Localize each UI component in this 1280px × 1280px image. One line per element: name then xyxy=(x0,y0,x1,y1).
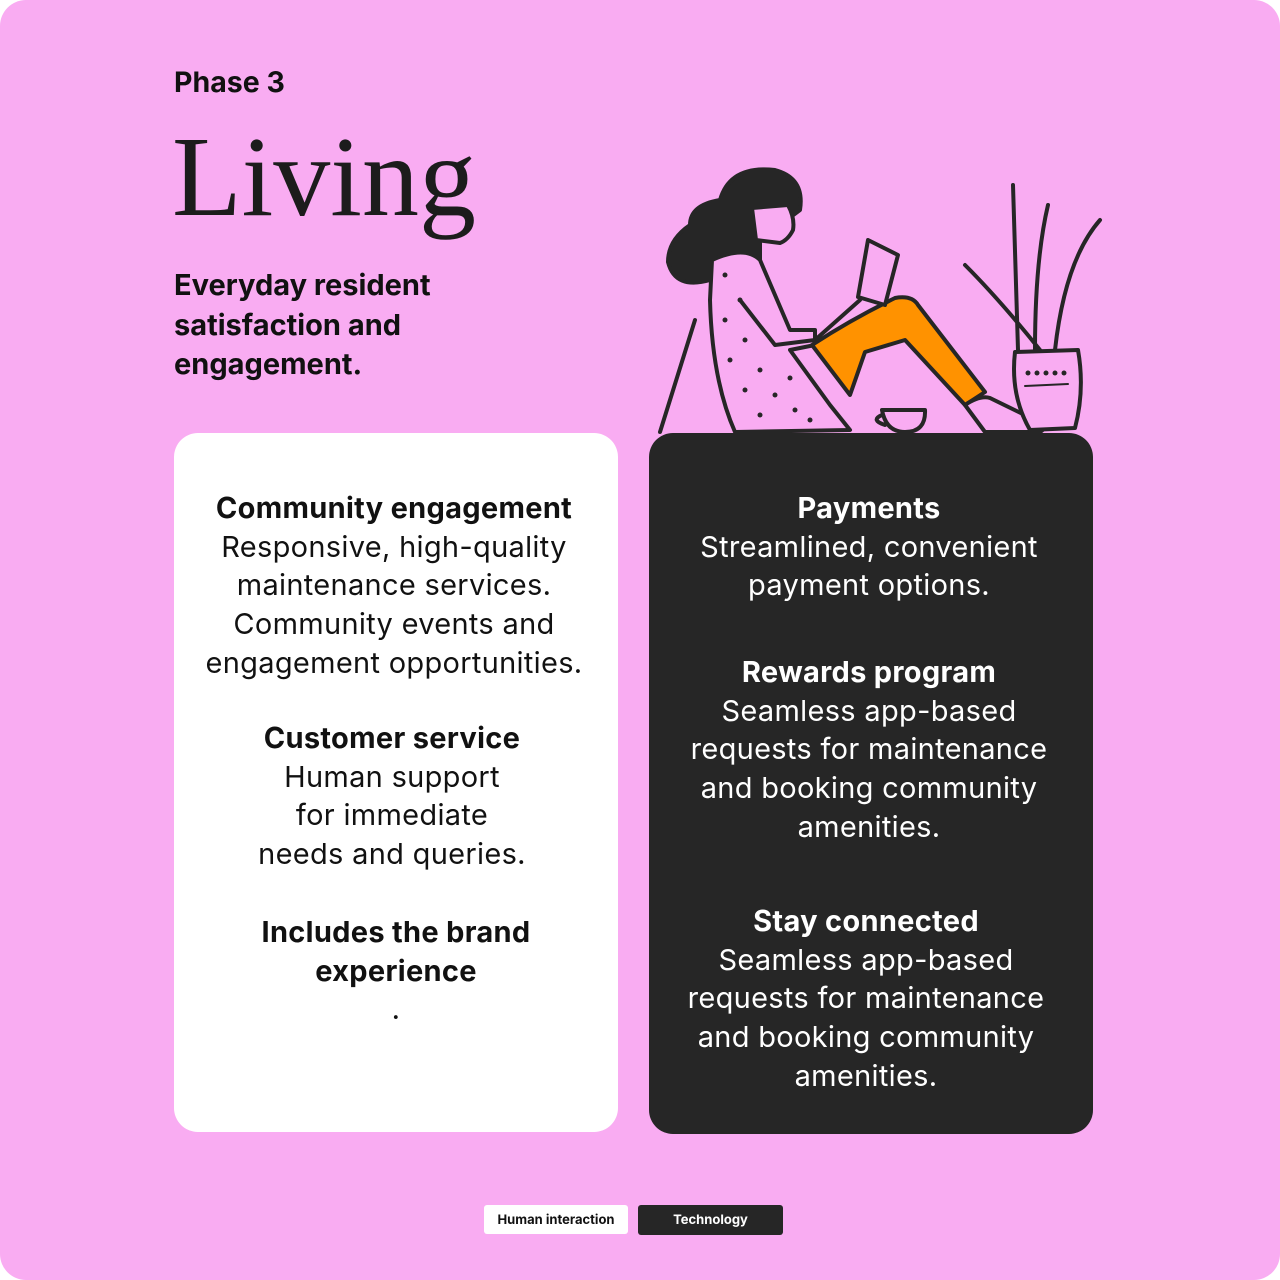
legend: human interaction: Human interaction xyxy=(497,1212,615,1228)
legend: technology xyxy=(638,1205,783,1235)
body/shirt xyxy=(710,252,850,432)
customer service: needs and queries. xyxy=(258,836,526,871)
hair xyxy=(668,169,801,283)
customer service: Human support xyxy=(284,759,500,794)
customer service xyxy=(258,720,526,871)
rewards program: and booking community xyxy=(701,770,1037,805)
community engagement: maintenance services. xyxy=(237,567,551,602)
rewards program xyxy=(691,654,1047,844)
brand experience: experience xyxy=(315,953,477,988)
payments xyxy=(700,490,1038,602)
brand experience: . xyxy=(392,991,400,1026)
stay connected: requests for maintenance xyxy=(688,980,1044,1015)
community engagement xyxy=(206,490,582,680)
subtitle: engagement. xyxy=(174,346,362,381)
foot xyxy=(965,397,1043,432)
arm xyxy=(740,300,860,345)
customer service: for immediate xyxy=(296,797,488,832)
community engagement: Community events and xyxy=(233,606,555,641)
pot xyxy=(1014,350,1081,430)
cup xyxy=(877,410,925,432)
chair back xyxy=(660,320,695,432)
stay connected: Stay connected xyxy=(753,903,979,938)
stay connected xyxy=(688,903,1044,1093)
title: Living xyxy=(172,113,476,240)
payments: Streamlined, convenient xyxy=(700,529,1038,564)
rewards program: amenities. xyxy=(798,809,940,844)
stay connected: and booking community xyxy=(698,1019,1034,1054)
subtitle: Everyday resident xyxy=(174,267,431,302)
stay connected: Seamless app-based xyxy=(718,942,1014,977)
subtitle xyxy=(174,267,431,381)
rewards program: Seamless app-based xyxy=(721,693,1017,728)
brand experience: Includes the brand xyxy=(262,914,530,949)
panel: technology xyxy=(649,433,1093,1134)
stay connected: amenities. xyxy=(795,1058,937,1093)
payments: payment options. xyxy=(748,567,990,602)
customer service: Customer service xyxy=(264,720,520,755)
book xyxy=(858,240,898,305)
community engagement: engagement opportunities. xyxy=(206,645,582,680)
plant leaves xyxy=(965,185,1100,350)
community engagement: Responsive, high-quality xyxy=(221,529,567,564)
illustration: woman reading with plant xyxy=(658,167,1102,434)
payments: Payments xyxy=(797,490,941,525)
subtitle: satisfaction and xyxy=(174,306,401,342)
rewards program: Rewards program xyxy=(742,654,996,689)
legend: technology: Technology xyxy=(673,1212,748,1228)
panel: human interaction xyxy=(174,433,618,1132)
legs xyxy=(812,297,985,405)
brand experience xyxy=(262,914,530,1026)
legend: human interaction xyxy=(484,1205,628,1234)
face xyxy=(752,205,793,243)
phase label: Phase 3 xyxy=(174,64,285,99)
rewards program: requests for maintenance xyxy=(691,731,1047,766)
community engagement: Community engagement xyxy=(216,490,572,525)
